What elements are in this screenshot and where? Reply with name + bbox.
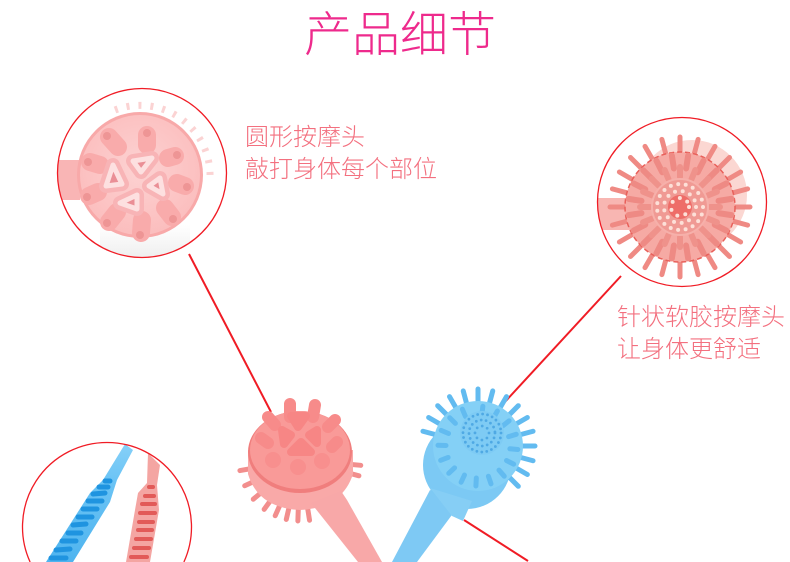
text block: needle massage head caption bbox=[617, 304, 785, 363]
callout: needle soft massage head close-up bbox=[598, 118, 766, 286]
text block: needle massage head caption: 针状软胶按摩头 bbox=[617, 304, 785, 331]
product: blue massager bbox=[392, 389, 535, 562]
pink handle bbox=[311, 491, 382, 562]
callout: ribbed handle close-up bbox=[22, 442, 191, 562]
illustration: product detail artwork bbox=[22, 88, 768, 562]
title: 产品细节 bbox=[304, 9, 496, 62]
product: pink massager bbox=[240, 404, 382, 562]
text block: round massage head caption bbox=[245, 124, 437, 183]
arrow: line to handle bbox=[464, 520, 528, 561]
text block: needle massage head caption: 让身体更舒适 bbox=[617, 336, 761, 363]
callout: round massage head close-up bbox=[56, 88, 226, 258]
text block: round massage head caption: 圆形按摩头 bbox=[245, 124, 365, 151]
text block: round massage head caption: 敲打身体每个部位 bbox=[245, 156, 437, 183]
arrow: line to needle head bbox=[503, 276, 621, 404]
arrow: line to round head bbox=[189, 254, 271, 412]
blue handle bbox=[392, 490, 463, 562]
